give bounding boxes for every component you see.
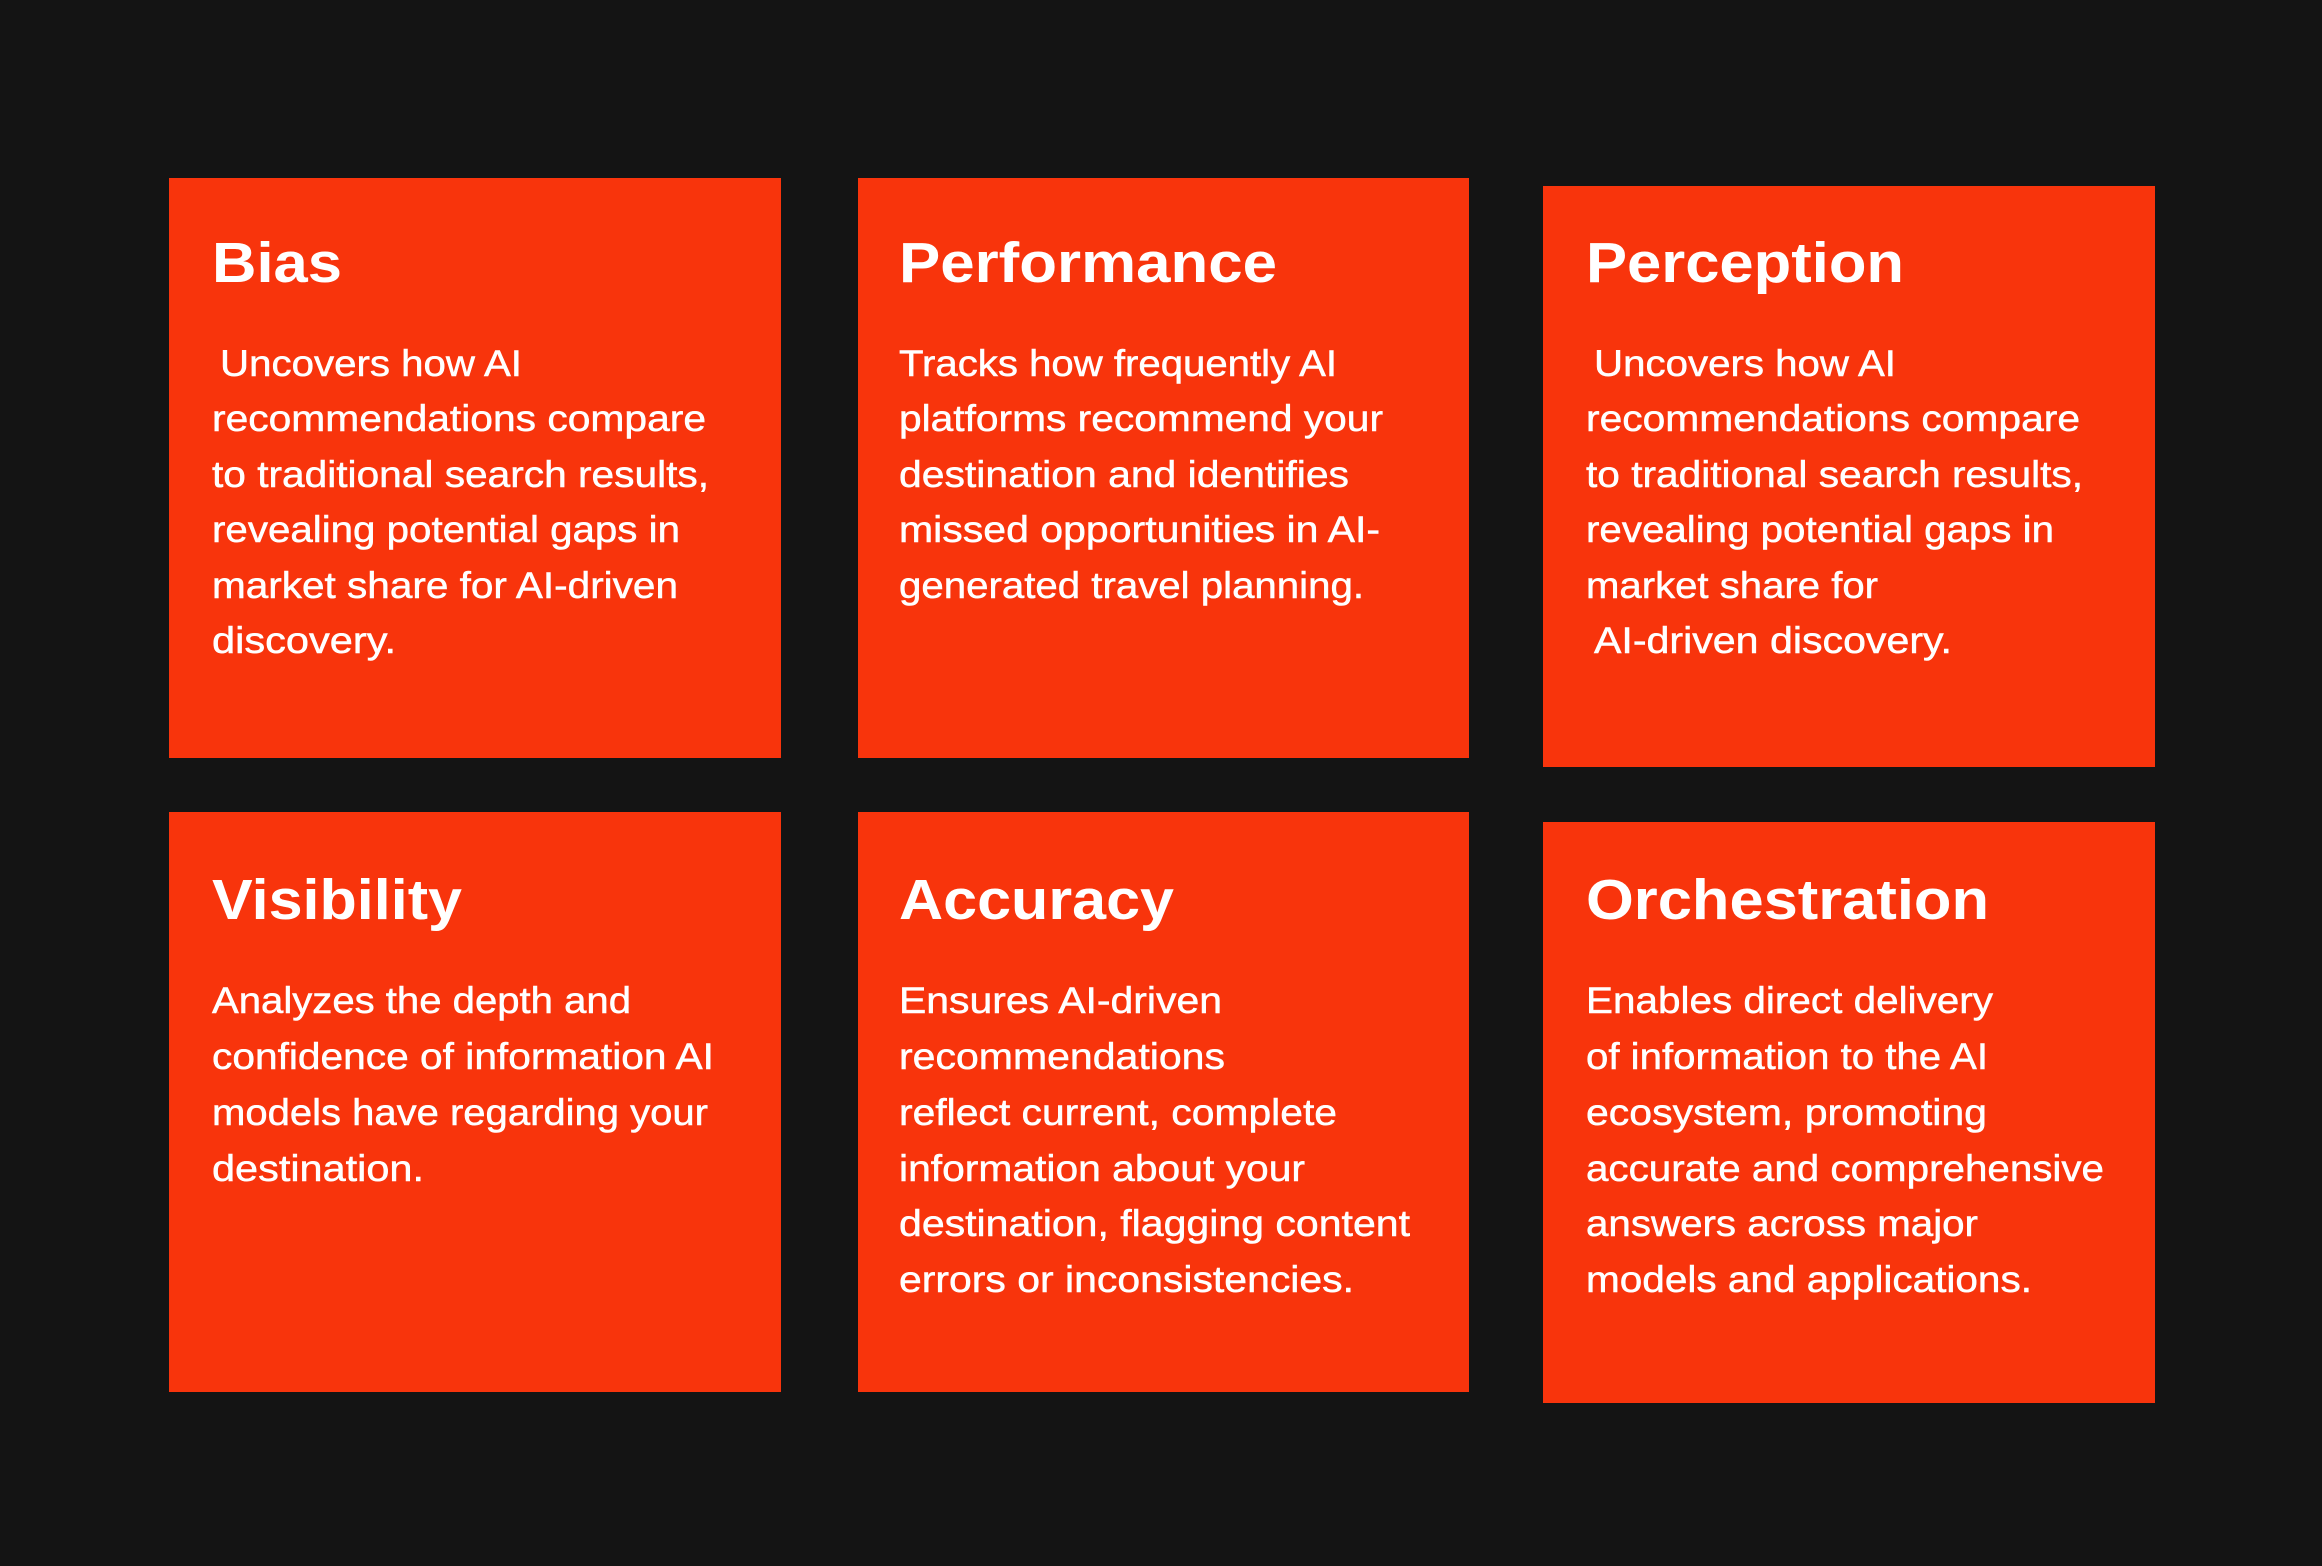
- text block: Performance description: destination and identifies: [899, 454, 1349, 495]
- heading: Perception: Perception: [1586, 231, 1904, 295]
- text block: Perception description: revealing potential gaps in: [1586, 509, 2054, 550]
- text block: Orchestration description: [1586, 980, 2104, 1300]
- panel: Orchestration: [1543, 822, 2155, 1403]
- heading: Bias: Bias: [212, 231, 342, 295]
- panel: Performance: [858, 178, 1469, 758]
- text block: Performance description: generated travel planning.: [899, 565, 1364, 606]
- text block: Orchestration description: Enables direct delivery: [1586, 980, 1994, 1021]
- text block: Bias description: market share for AI-driven: [212, 565, 678, 606]
- text block: Bias description: Uncovers how AI: [220, 343, 522, 384]
- heading: Orchestration: Orchestration: [1586, 868, 1989, 932]
- panel: Bias: [169, 178, 781, 758]
- text block: Bias description: [212, 343, 709, 661]
- text block: Visibility description: confidence of information AI: [212, 1036, 714, 1077]
- text block: Accuracy description: Ensures AI-driven: [899, 980, 1222, 1021]
- text block: Perception description: [1586, 343, 2083, 661]
- text block: Visibility description: models have regarding your: [212, 1092, 708, 1133]
- text block: Accuracy description: recommendations: [899, 1036, 1225, 1077]
- text block: Performance description: Tracks how frequently AI: [899, 343, 1337, 384]
- text block: Accuracy description: errors or inconsistencies.: [899, 1259, 1354, 1300]
- text block: Bias description: recommendations compare: [212, 398, 706, 439]
- heading: Performance: Performance: [899, 231, 1277, 295]
- text block: Accuracy description: information about your: [899, 1148, 1305, 1189]
- text block: Performance description: [899, 343, 1383, 606]
- text block: Accuracy description: [899, 980, 1411, 1300]
- text block: Perception description: recommendations compare: [1586, 398, 2080, 439]
- panel: Accuracy: [858, 812, 1469, 1392]
- text block: Perception description: Uncovers how AI: [1594, 343, 1896, 384]
- text block: Orchestration description: answers across major: [1586, 1203, 1978, 1244]
- text block: Bias description: to traditional search results,: [212, 454, 709, 495]
- heading: Visibility: Visibility: [212, 868, 462, 932]
- panel: Perception: [1543, 186, 2155, 767]
- text block: Orchestration description: accurate and comprehensive: [1586, 1148, 2104, 1189]
- text block: Visibility description: destination.: [212, 1148, 424, 1189]
- text block: Accuracy description: reflect current, complete: [899, 1092, 1337, 1133]
- heading: Accuracy: Accuracy: [899, 868, 1174, 932]
- text block: Performance description: missed opportunities in AI-: [899, 509, 1380, 550]
- text block: Perception description: market share for: [1586, 565, 1878, 606]
- text block: Bias description: revealing potential gaps in: [212, 509, 680, 550]
- text block: Bias description: discovery.: [212, 620, 396, 661]
- panel: Visibility: [169, 812, 781, 1392]
- text block: Orchestration description: models and applications.: [1586, 1259, 2032, 1300]
- text block: Visibility description: [212, 980, 714, 1189]
- text block: Performance description: platforms recommend your: [899, 398, 1383, 439]
- text block: Orchestration description: of information to the AI: [1586, 1036, 1988, 1077]
- text block: Orchestration description: ecosystem, promoting: [1586, 1092, 1987, 1133]
- text block: Perception description: to traditional search results,: [1586, 454, 2083, 495]
- text block: Visibility description: Analyzes the depth and: [212, 980, 631, 1021]
- text block: Accuracy description: destination, flagging content: [899, 1203, 1411, 1244]
- text block: Perception description: AI-driven discovery.: [1594, 620, 1952, 661]
